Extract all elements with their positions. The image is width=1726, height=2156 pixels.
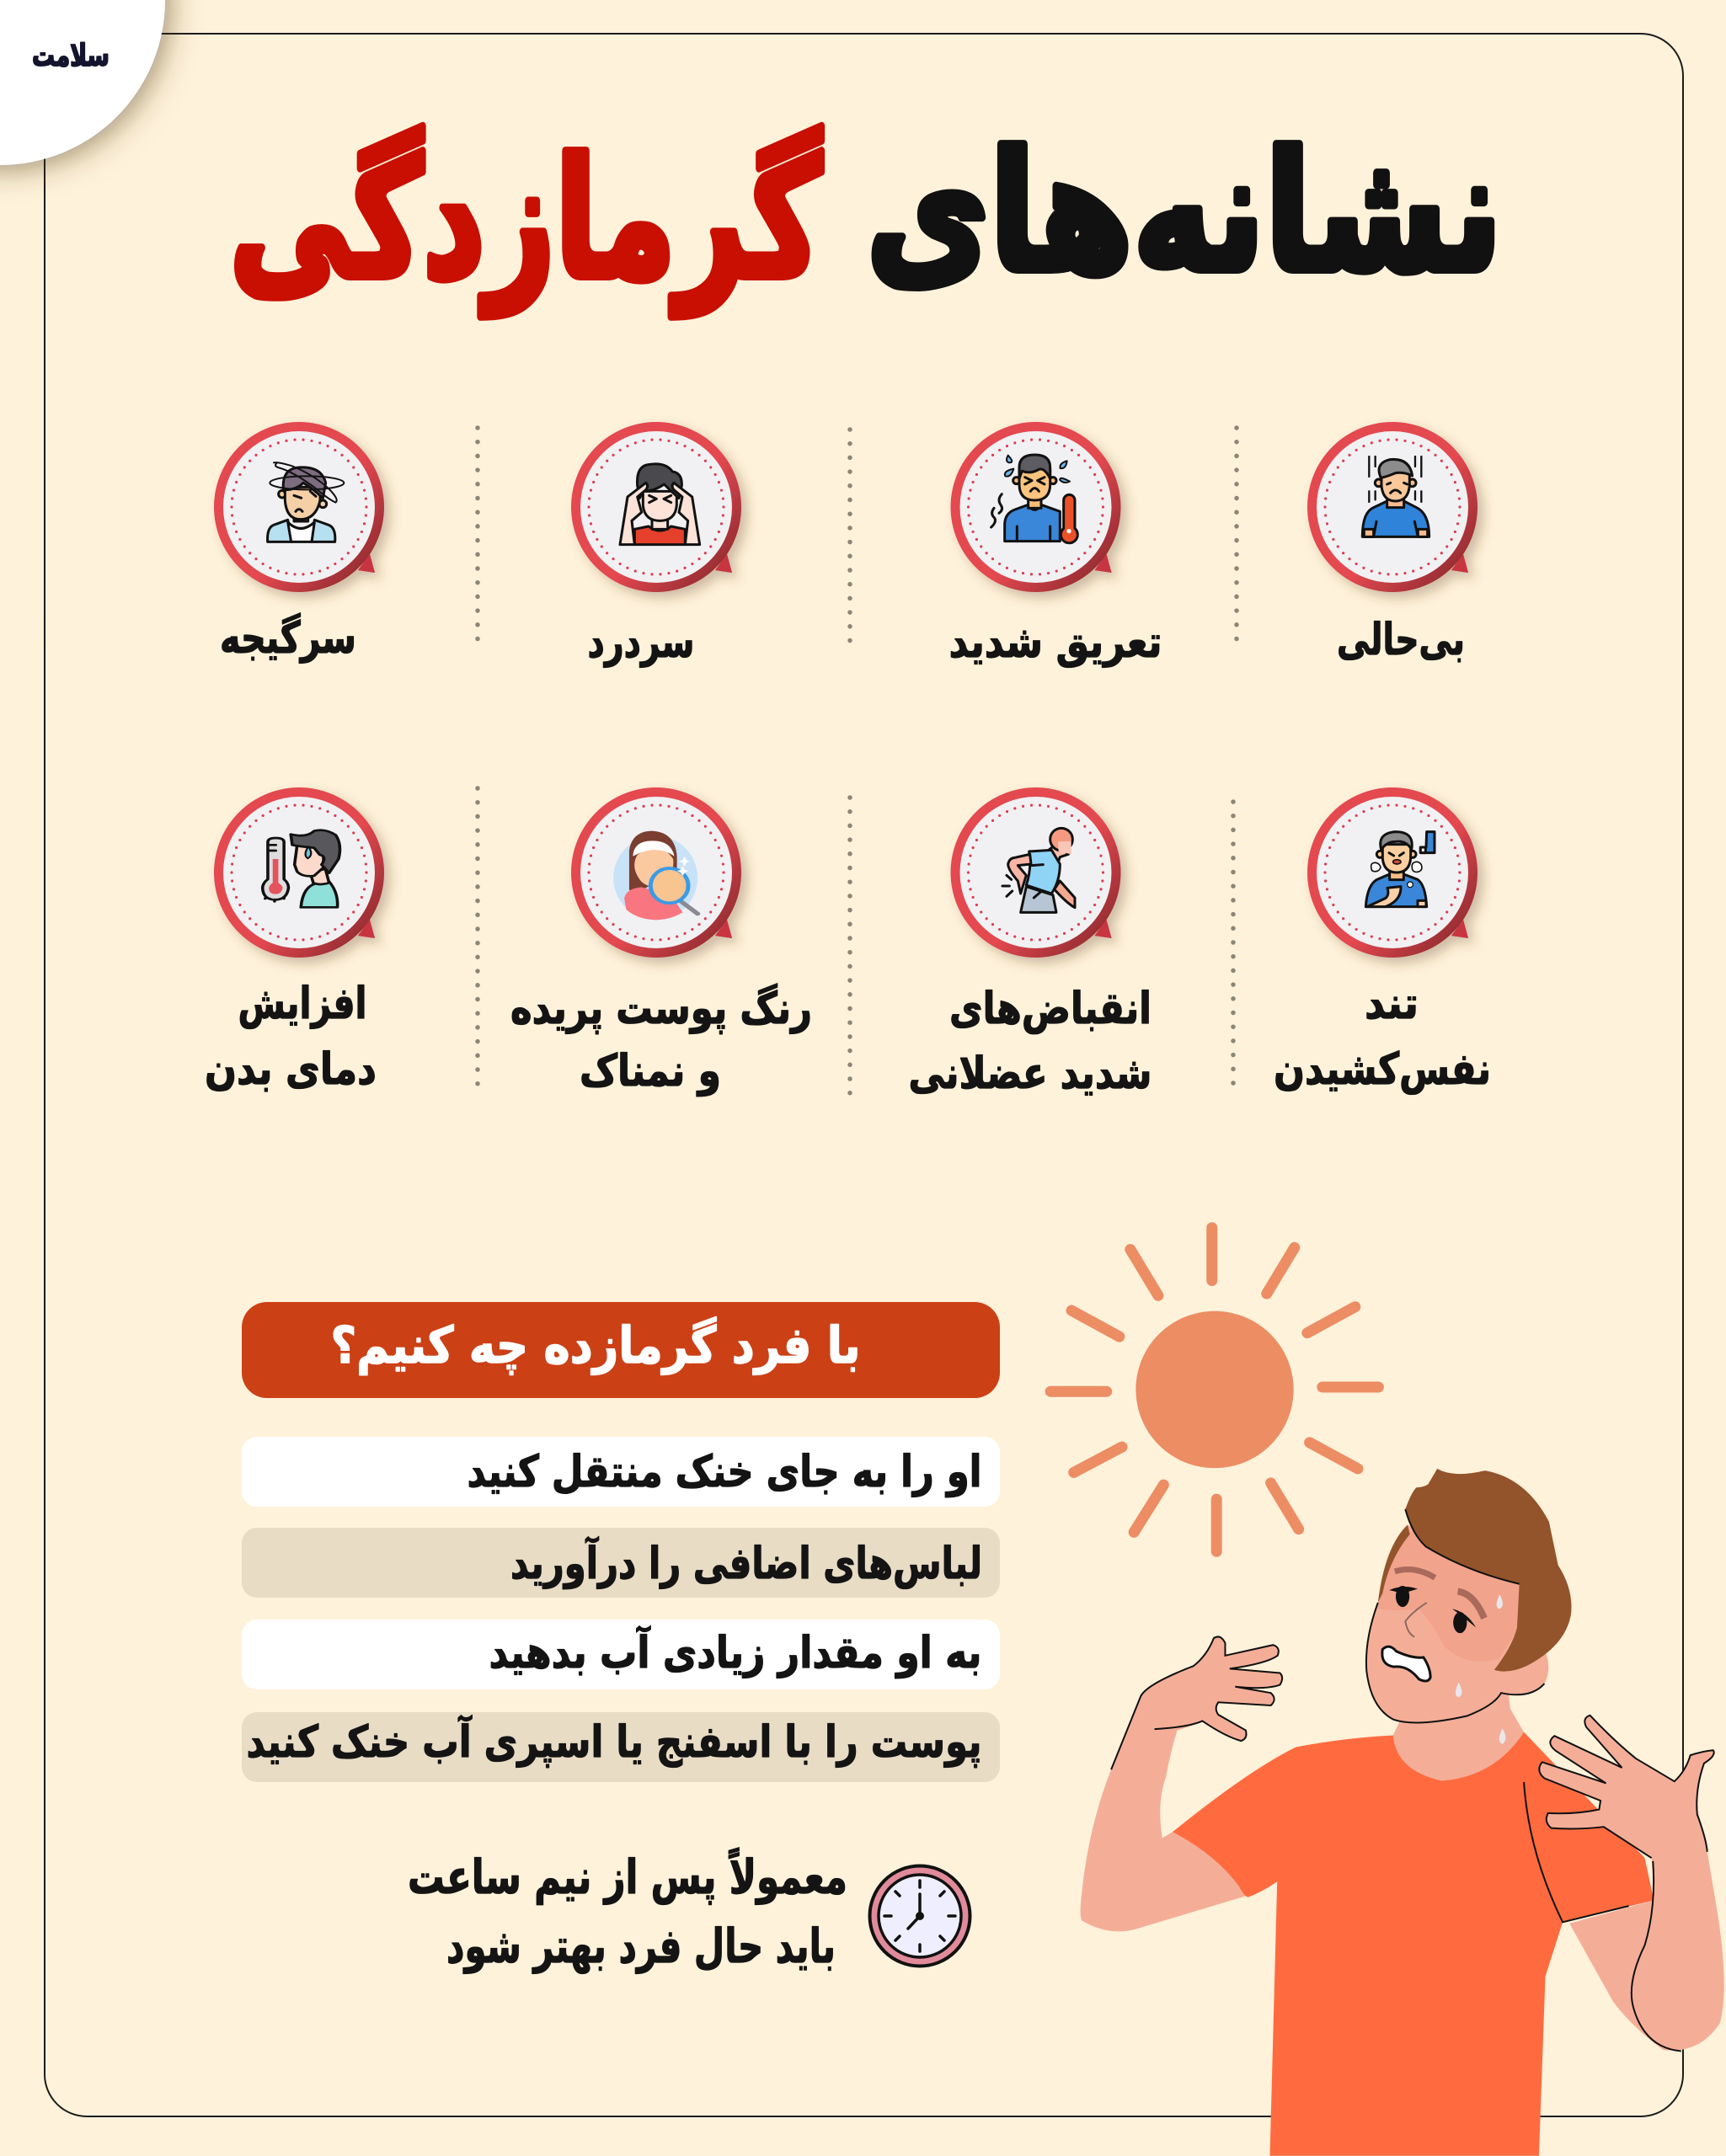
heading banner (242, 1302, 1000, 1398)
icon: weak person (1362, 456, 1429, 536)
face (1366, 1524, 1548, 1723)
label: انقباض‌های (949, 984, 1152, 1034)
symptom: raised body temperature (205, 787, 384, 1095)
recovery note (408, 1847, 847, 1974)
step 3 (242, 1620, 1000, 1689)
title: نشانه‌های (866, 117, 1503, 309)
t-shirt (1173, 1732, 1654, 2156)
eyebrows (1395, 1569, 1435, 1577)
icon: thermometer and person profile (263, 830, 340, 907)
symptom: dizziness (214, 422, 384, 664)
nose (1405, 1603, 1427, 1637)
recovery note: معمولاً پس از نیم ساعت (408, 1847, 847, 1905)
step 1: او را به جای خنک منتقل کنید (467, 1447, 982, 1497)
corner badge: سلامت (32, 39, 110, 73)
label: تعریق شدید (948, 617, 1162, 668)
label: شدید عضلانی (908, 1049, 1152, 1099)
label: افزایش (238, 979, 367, 1029)
label: بی‌حالی (1337, 615, 1465, 665)
symptom: rapid breathing (1274, 787, 1491, 1095)
body outlines (1111, 1509, 1714, 2051)
left arm and hand (1081, 1636, 1282, 1931)
label: دمای بدن (205, 1044, 377, 1095)
step 1 (242, 1437, 1000, 1507)
icon: person holding head (620, 464, 700, 545)
step 2: لباس‌های اضافی را درآورید (510, 1536, 982, 1589)
icon: breathless person with inhaler (1365, 832, 1435, 907)
step 2 (242, 1528, 1000, 1598)
label: و نمناک (580, 1046, 721, 1097)
label: نفس‌کشیدن (1274, 1044, 1491, 1095)
eyes (1389, 1586, 1476, 1633)
icon: dizzy person (268, 462, 344, 542)
label (908, 984, 1152, 1099)
label: تند (1365, 979, 1419, 1029)
label (1274, 979, 1491, 1095)
symptom: headache (571, 422, 741, 668)
illustration: overheated man (1081, 1469, 1724, 2156)
right arm and hand (1539, 1716, 1724, 2051)
title: گرمازدگی (229, 124, 822, 317)
symptom: pale damp skin (510, 787, 812, 1097)
symptom: muscle spasms (908, 787, 1152, 1099)
title (229, 117, 1503, 317)
illustration: sun (1050, 1228, 1378, 1551)
label (510, 983, 812, 1097)
symptom: heavy sweating (948, 422, 1162, 668)
icon: clock (869, 1866, 970, 1966)
label: سردرد (588, 617, 694, 668)
sweat drops (1456, 1594, 1505, 1744)
flushed cheeks (1378, 1531, 1521, 1662)
symptom: weakness (1307, 422, 1478, 665)
hair (1378, 1469, 1571, 1672)
icon: person with back pain (1002, 828, 1075, 912)
label (205, 979, 377, 1095)
icon: face under magnifier (613, 831, 697, 920)
divider dots row 1 and row 2 (478, 428, 1237, 1100)
neck (1393, 1689, 1524, 1780)
label: رنگ پوست پریده (510, 983, 812, 1034)
step 4: پوست را با اسفنج یا اسپری آب خنک کنید (246, 1715, 982, 1768)
recovery note: باید حال فرد بهتر شود (446, 1919, 836, 1974)
step 4 (242, 1712, 1000, 1782)
mouth (1382, 1646, 1430, 1681)
label: سرگیجه (220, 612, 356, 664)
icon: sweating person (991, 455, 1077, 543)
corner badge (0, 0, 165, 165)
panel: what to do (242, 1302, 1000, 1782)
step 3: به او مقدار زیادی آب بدهید (489, 1625, 982, 1678)
heading banner: با فرد گرمازده چه کنیم؟ (330, 1316, 861, 1375)
